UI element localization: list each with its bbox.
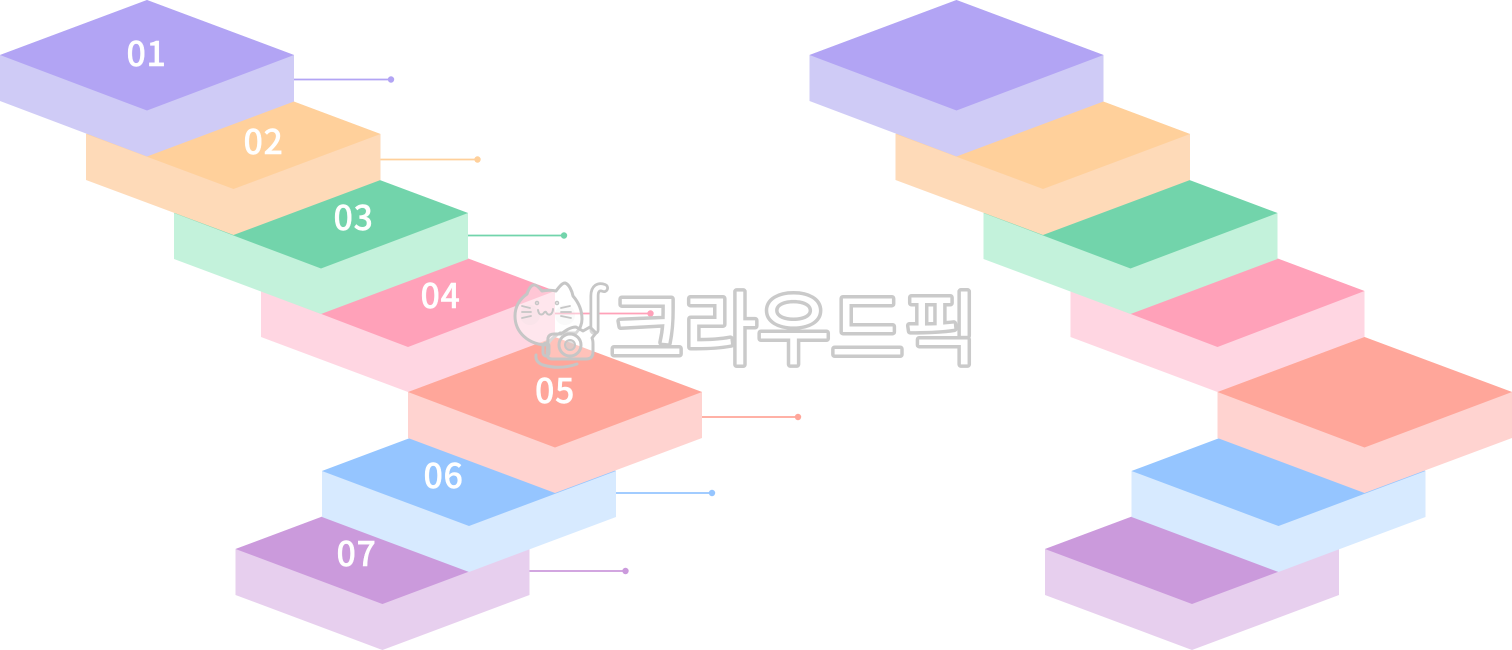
- panel: right staircase: [810, 0, 1512, 650]
- leader line 7: [529, 568, 629, 574]
- leader line 3: [468, 232, 567, 239]
- leader line 2: [380, 156, 481, 163]
- leader line 1: [294, 76, 394, 83]
- step 04 block copy: [1070, 236, 1364, 392]
- watermark wordmark inner: 우드픽: [757, 266, 978, 382]
- watermark wordmark inner: [610, 266, 978, 382]
- number 03: 03: [334, 191, 373, 240]
- watermark: [515, 266, 978, 382]
- number 02: 02: [244, 115, 283, 164]
- watermark wordmark outline: 크라: [610, 266, 757, 382]
- step 06 block copy: [1132, 416, 1426, 572]
- step 05 block: [408, 337, 702, 493]
- leader line 5: [702, 414, 801, 420]
- number 06: 06: [424, 449, 463, 498]
- icon: cat with camera: [515, 283, 604, 367]
- step 02 block: [86, 79, 380, 235]
- watermark wordmark outline: 우드픽: [757, 266, 978, 382]
- step 07 block copy: [1045, 494, 1339, 650]
- number 04: 04: [421, 269, 460, 318]
- step 03 block: [174, 158, 468, 314]
- number 07: 07: [337, 527, 376, 576]
- step 07 block: [236, 494, 530, 650]
- watermark wordmark outline: [610, 266, 978, 382]
- number 05: 05: [535, 364, 575, 413]
- step 05 block copy: [1218, 337, 1512, 493]
- step 06 block: [322, 416, 616, 572]
- number 01: 01: [127, 27, 166, 76]
- step 01 block copy: [810, 0, 1104, 156]
- step 01 block: [0, 0, 294, 156]
- watermark wordmark inner: 크라: [610, 266, 757, 382]
- leader line 6: [616, 490, 715, 496]
- leader line 4: [554, 310, 654, 317]
- step 02 block copy: [896, 79, 1190, 235]
- step 04 block: [261, 236, 555, 392]
- step 03 block copy: [984, 158, 1278, 314]
- panel: left staircase: [0, 0, 801, 650]
